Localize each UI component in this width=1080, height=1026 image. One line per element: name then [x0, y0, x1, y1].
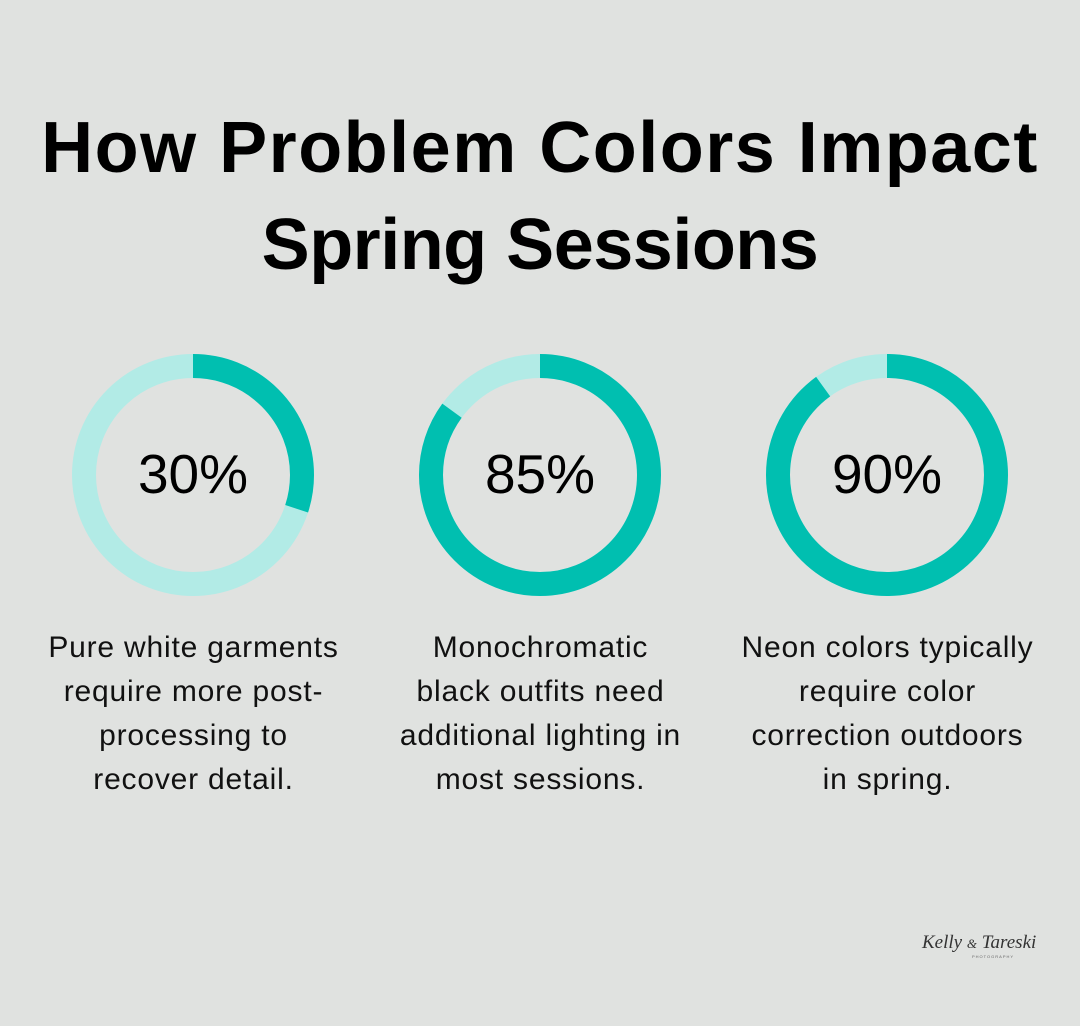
text: neon colors	[742, 631, 1033, 796]
text: white garments: require more post-	[64, 675, 323, 708]
title	[41, 108, 1039, 285]
logo signature: Kelly & Tareski	[922, 932, 1036, 953]
donut: 85%	[431, 366, 649, 584]
title: Spring Sessions	[262, 205, 818, 285]
text: white garments: processing to	[99, 719, 288, 752]
title: How Problem Colors Impact	[41, 108, 1039, 188]
text: black outfits	[400, 631, 681, 796]
text: neon colors: require color	[799, 675, 976, 708]
text: black outfits: most sessions.	[436, 763, 645, 796]
text: neon colors: in spring.	[823, 763, 952, 796]
text: white garments: recover detail.	[93, 763, 294, 796]
text: white garments	[48, 631, 339, 796]
donut: 30%: 30%	[138, 443, 248, 505]
text: neon colors: Neon colors typically	[742, 631, 1033, 664]
donut: 90%	[778, 366, 996, 584]
donut charts	[72, 354, 1008, 596]
donut: 90%: 90%	[832, 443, 942, 505]
text: black outfits: Monochromatic	[433, 631, 648, 664]
text: neon colors: correction outdoors	[751, 719, 1024, 752]
logo signature: PHOTOGRAPHY	[972, 954, 1014, 959]
text: black outfits: black outfits need	[417, 675, 664, 708]
donut: 30%	[84, 366, 302, 584]
text: white garments: Pure white garments	[48, 631, 339, 664]
donut: 85%: 85%	[485, 443, 595, 505]
text: black outfits: additional lighting in	[400, 719, 681, 752]
